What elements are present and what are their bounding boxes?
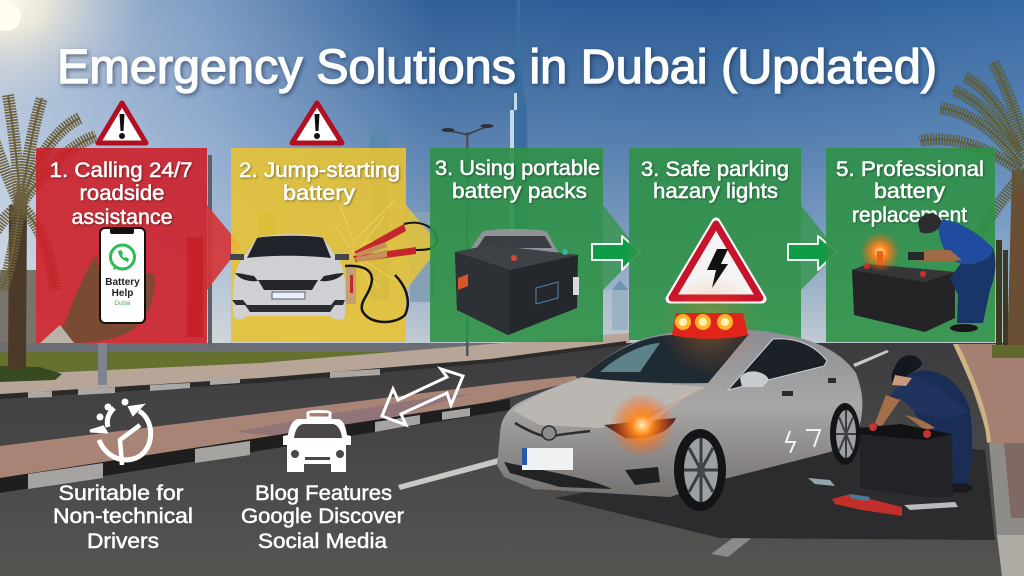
illustration: white car front view: [230, 234, 349, 320]
panel background: yellow: [231, 148, 406, 342]
panel 2: jump-starting battery: [230, 103, 437, 342]
icon: WhatsApp logo: [110, 245, 134, 270]
panel background: green: [629, 148, 801, 340]
left palm tree: [0, 95, 96, 370]
background: road surface: [0, 341, 1024, 576]
caption: Social Media: [258, 530, 387, 553]
panel 1 heading: 1. Calling 24/7: [50, 159, 192, 182]
panel 1: calling roadside assistance: [36, 103, 207, 343]
car windscreen: [582, 334, 749, 383]
panel 2 heading: 2. Jump-starting: [239, 159, 400, 182]
caption: Drivers: [87, 530, 159, 553]
panel 5 heading: [836, 158, 984, 227]
panel 3 heading: 3. Using portable: [435, 157, 600, 180]
icon: hand holding phone: [40, 228, 154, 343]
caption: Suritable for: [58, 482, 184, 505]
roof light bar: [660, 275, 760, 375]
caption: [53, 482, 193, 553]
illustration: technician leaning over battery: [908, 213, 995, 332]
panel 4: safe parking hazard lights: [629, 148, 837, 340]
illustration: car battery with warning light: [852, 232, 955, 332]
background: brick median and striped curb: [0, 376, 580, 493]
sign pole: [98, 343, 107, 385]
panel 3: portable battery packs: [430, 148, 640, 342]
warning triangle: [98, 103, 146, 143]
panel 5: professional battery replacement: [826, 148, 995, 342]
icon: circular refresh clock: [90, 400, 151, 465]
panel background: green: [430, 148, 603, 342]
rear wheel: [830, 403, 860, 465]
icon: double-headed arrow: [382, 369, 463, 425]
warning triangle: [292, 103, 342, 143]
panel background: red: [36, 148, 207, 343]
icon: taxi front view: [283, 412, 351, 472]
illustration: tools on road: [808, 478, 958, 516]
car grille and bumper: [504, 423, 660, 489]
door lightning marks: [786, 430, 820, 453]
caption: Blog Features: [255, 482, 392, 505]
illustration: emergency car with roof light: [497, 275, 995, 540]
panel 4 heading: 3. Safe parking: [641, 158, 789, 181]
panel 2 heading: [239, 159, 400, 205]
illustration: large car battery on road: [858, 423, 953, 497]
door handles: [782, 378, 836, 396]
panel 2 heading: battery: [283, 182, 356, 205]
bonnet highlight: [512, 378, 706, 428]
car body: [497, 329, 862, 497]
panel 1 heading: roadside: [80, 182, 164, 205]
caption: Non-technical: [53, 505, 193, 528]
front wheel: [674, 429, 726, 511]
arrow: white-outlined green arrow: [788, 236, 837, 270]
icon: hand holding phone: Battery: [105, 277, 140, 288]
background: grass, sidewalk: [0, 333, 640, 396]
title: Emergency Solutions in Dubai (Updated): [57, 41, 937, 94]
background pole: [208, 155, 212, 345]
arrow: yellow chevron to step 3: [406, 205, 440, 290]
icon: hand holding phone: Help: [112, 288, 133, 299]
panel 1 heading: assistance: [72, 206, 172, 229]
car shadow: [555, 440, 995, 540]
panel 4 heading: [641, 158, 789, 203]
car side windows: [728, 339, 827, 390]
car mirror: [740, 371, 769, 387]
street lamp: [442, 124, 494, 356]
caption: Google Discover: [241, 505, 404, 528]
arrow: white-outlined green arrow: [592, 236, 640, 270]
illustration: portable battery pack with car behind: [455, 229, 579, 335]
caption: [241, 482, 404, 553]
right palm tree: [920, 62, 1024, 358]
feature: suitable for non-technical drivers: [53, 400, 193, 553]
panel background: green: [826, 148, 995, 342]
illustration: mechanic working on battery: [875, 355, 972, 493]
icon: hazard triangle with lightning bolt: [670, 222, 762, 299]
arrow: green chevron to step 4: [603, 205, 640, 290]
feature: blog features: [241, 412, 404, 553]
background: Dubai skyline: [0, 0, 629, 350]
arrow: red chevron to step 2: [207, 205, 241, 290]
panel 4 heading: hazary lights: [653, 180, 778, 203]
icon: hand holding phone: Dubai: [115, 301, 130, 307]
panel 1 heading: [50, 159, 192, 229]
background: right-hand kerb and pavement: [953, 344, 1024, 576]
background: sky and sun: [0, 0, 1024, 360]
panel 5 heading: battery: [874, 180, 946, 203]
panel 5 heading: 5. Professional: [836, 158, 984, 181]
headlight with flare: [604, 385, 700, 457]
panel 3 heading: battery packs: [452, 180, 587, 203]
illustration: jumper cables: [345, 223, 437, 322]
road lane markings: [398, 350, 889, 557]
panel 3 heading: [435, 157, 600, 203]
panel 5 heading: replacement: [852, 204, 967, 227]
arrow: green chevron to step 5: [801, 205, 838, 290]
illustration: sparks: [335, 200, 395, 290]
